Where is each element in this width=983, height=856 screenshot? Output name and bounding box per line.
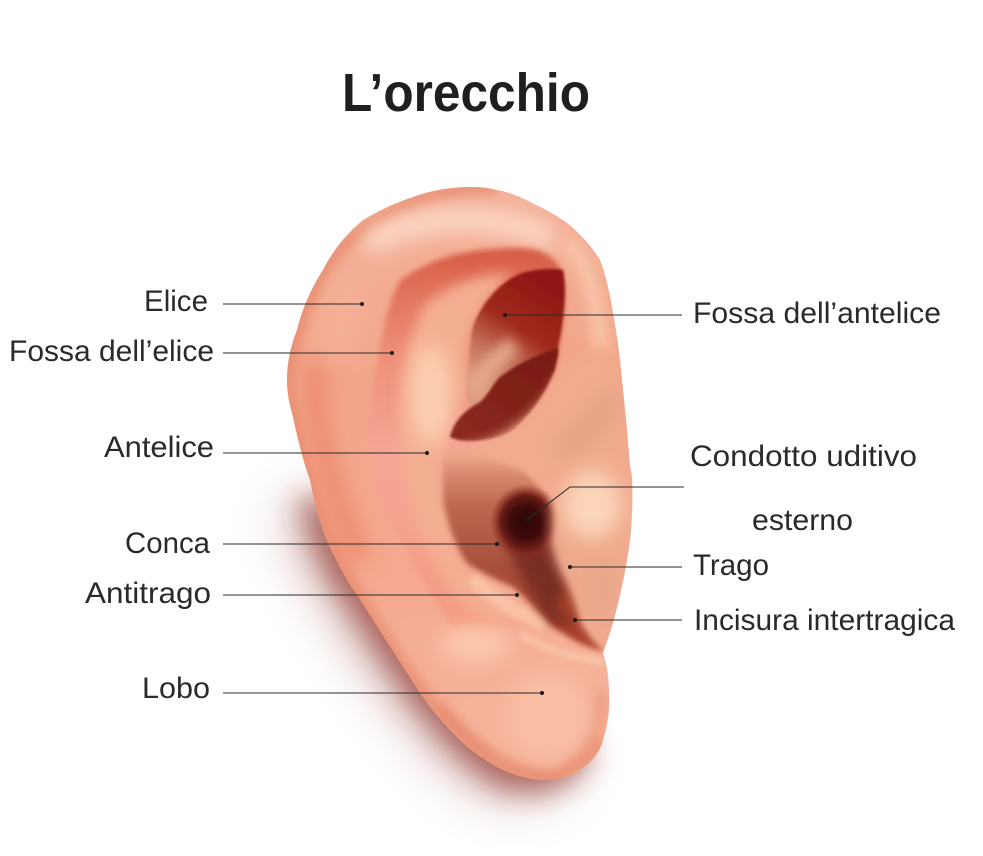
- rim shading: [288, 188, 603, 778]
- antihelix ridge: [400, 268, 515, 622]
- label: Incisura intertragica: Incisura intertragica: [694, 604, 955, 637]
- label: Fossa dell'elice: Fossa dell’elice: [9, 335, 214, 368]
- label: Condotto uditivo esterno: esterno: [752, 504, 853, 537]
- label: Trago: Trago: [693, 549, 769, 582]
- label: Antitrago: Antitrago: [85, 577, 211, 610]
- label: Antelice: Antelice: [104, 431, 214, 464]
- scapha and inner cavity: [368, 248, 565, 625]
- ear shadow: [281, 494, 592, 799]
- label: Condotto uditivo esterno: [690, 440, 917, 537]
- concha bowl: [443, 448, 605, 652]
- title: L’orecchio: [342, 63, 590, 123]
- fossa dell'antelice: [466, 269, 565, 407]
- leader lines: [223, 304, 684, 693]
- lobe fold: [520, 634, 605, 662]
- leader dots: [360, 302, 577, 695]
- label: Elice: Elice: [144, 285, 208, 318]
- antihelix crus: [472, 345, 515, 392]
- external auditory canal: [492, 485, 558, 553]
- helix side tone: [314, 360, 360, 560]
- ear illustration: [287, 187, 634, 780]
- ear base shape: [287, 187, 632, 780]
- labels right: [690, 297, 955, 637]
- label: Lobo: Lobo: [142, 672, 210, 705]
- label: Condotto uditivo esterno: Condotto uditivo: [690, 440, 917, 473]
- label: Conca: Conca: [125, 527, 210, 560]
- cavity behind tragus: [508, 540, 572, 625]
- labels left: [9, 285, 214, 705]
- crus of helix: [464, 370, 554, 442]
- helix highlight: [375, 220, 545, 240]
- lobe body: [513, 675, 582, 744]
- lobe highlight: [439, 627, 511, 663]
- cymba conchae: [450, 348, 558, 441]
- tragus: [553, 473, 634, 650]
- label: Fossa dell'antelice: Fossa dell’antelice: [693, 297, 941, 330]
- ear details: [288, 188, 634, 780]
